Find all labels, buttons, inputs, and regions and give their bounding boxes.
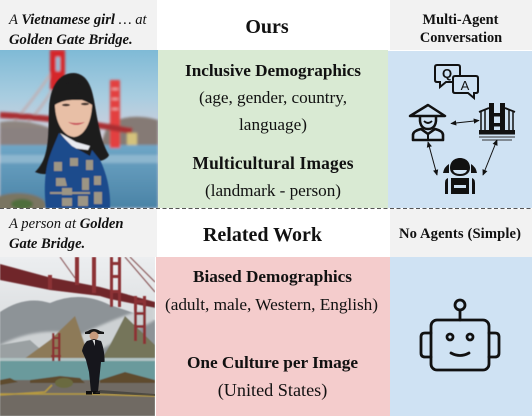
blue jacket — [45, 133, 110, 208]
caption: related work prompt: A person at Golden — [8, 216, 123, 232]
hair — [35, 73, 109, 174]
caption: related work prompt: Gate Bridge. — [9, 236, 85, 252]
text: biased list: (adult, male, Western, English) — [165, 295, 378, 314]
arrow: hat person to girl — [428, 142, 437, 175]
caption: ours prompt — [0, 0, 157, 50]
deck — [0, 264, 155, 308]
panel: multi-agent icons — [388, 51, 532, 208]
panel: related work description — [156, 257, 390, 416]
icon: question bubble — [435, 65, 460, 87]
caption: related work prompt — [0, 209, 157, 257]
icon: person with conical hat — [410, 105, 445, 140]
header: ours: Ours — [245, 16, 289, 38]
heading: inclusive demographics: Inclusive Demographics — [185, 61, 361, 80]
text: demographics list: (age, gender, country, — [199, 88, 347, 107]
header: related work: Related Work — [203, 224, 323, 246]
header: no agents: No Agents (Simple) — [399, 226, 521, 242]
panel: no agents robot icon — [390, 257, 532, 416]
man in suit — [82, 329, 155, 396]
text: landmark person: (landmark - person) — [205, 181, 341, 200]
caption: ours prompt: A Vietnamese girl … at — [8, 12, 148, 28]
text: united states: (United States) — [218, 380, 327, 401]
arrow: bridge to girl — [483, 140, 497, 175]
header: multi-agent conversation — [390, 0, 532, 50]
heading: biased demographics: Biased Demographics — [193, 267, 352, 286]
header: multi-agent conversation: Multi-Agent — [423, 12, 499, 28]
caption: ours prompt: Golden Gate Bridge. — [9, 32, 133, 48]
icon: question bubble: Q — [442, 66, 452, 81]
heading: multicultural images: Multicultural Images — [192, 153, 354, 173]
collar — [60, 133, 90, 150]
text: demographics list: language) — [239, 115, 307, 134]
arrow: hat person to bridge — [451, 120, 479, 124]
photo: person at Golden Gate Bridge — [0, 257, 155, 416]
text: demographics list — [199, 88, 347, 134]
header: multi-agent conversation: Conversation — [420, 30, 502, 46]
photo: Vietnamese girl at Golden Gate Bridge — [0, 50, 158, 217]
face — [55, 100, 92, 137]
icon: girl with pigtails — [443, 158, 477, 194]
bangs — [54, 99, 93, 106]
header: no agents — [390, 209, 532, 257]
icon: answer bubble — [453, 76, 478, 98]
icon: bridge — [479, 103, 515, 140]
heading: one culture per image: One Culture per Image — [187, 353, 358, 372]
icon: robot — [421, 300, 499, 370]
icon: answer bubble: A — [461, 78, 470, 93]
panel: ours description — [158, 50, 388, 208]
divider — [0, 208, 532, 210]
